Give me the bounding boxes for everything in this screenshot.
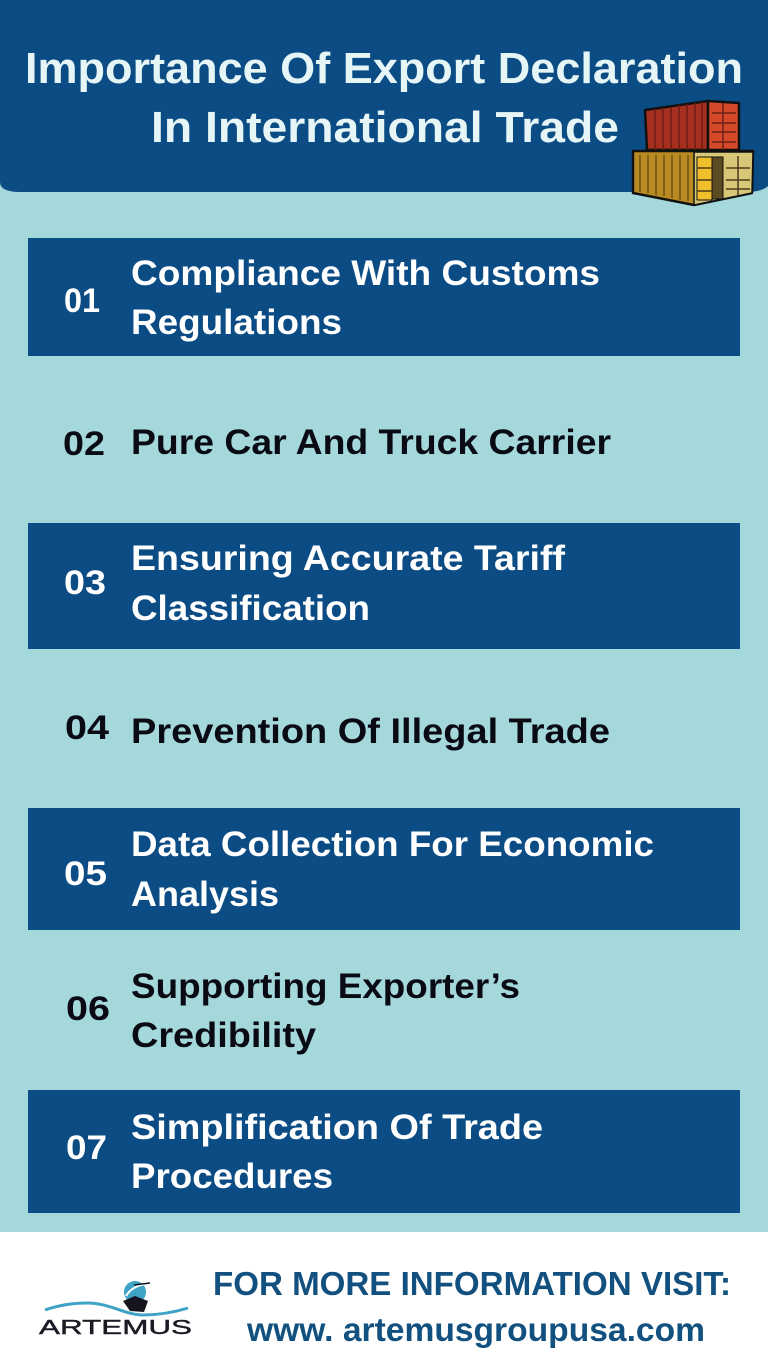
number 01: 01	[64, 282, 100, 320]
wave	[45, 1303, 188, 1315]
label 03: Ensuring Accurate Tariff	[131, 539, 565, 578]
label 01: Regulations	[131, 303, 342, 342]
number 05: 05	[64, 855, 107, 893]
title: In International Trade	[151, 103, 619, 152]
label 05: Data Collection For Economic	[131, 825, 654, 864]
label 06: Supporting Exporter’s	[131, 967, 520, 1006]
label 07: Procedures	[131, 1157, 333, 1196]
item 05 panel	[28, 808, 740, 930]
footer panel	[0, 1232, 768, 1365]
label 05: Analysis	[131, 875, 279, 914]
label 07	[131, 1108, 543, 1196]
label 02: Pure Car And Truck Carrier	[131, 423, 611, 462]
call to action: FOR MORE INFORMATION VISIT:	[213, 1265, 731, 1302]
label 06: Credibility	[131, 1016, 317, 1055]
item 02	[63, 423, 611, 463]
number 06: 06	[66, 990, 110, 1028]
label 03: Classification	[131, 589, 370, 628]
header banner	[0, 0, 768, 192]
item 07 panel	[28, 1090, 740, 1213]
logo: Artemus	[39, 1281, 192, 1339]
icon: ship	[123, 1296, 148, 1312]
label 04: Prevention Of Illegal Trade	[131, 712, 610, 751]
call to action	[213, 1265, 731, 1348]
logo wordmark: ARTEMUS	[39, 1317, 192, 1339]
label 03	[131, 539, 565, 628]
title	[25, 44, 743, 152]
item 01 panel	[28, 238, 740, 356]
number 02: 02	[63, 425, 105, 463]
icon: stacked shipping containers	[633, 101, 753, 205]
title: Importance Of Export Declaration	[25, 44, 743, 93]
item 04	[65, 709, 610, 751]
item 06	[66, 967, 520, 1055]
number 07: 07	[66, 1129, 107, 1167]
label 01	[131, 254, 600, 342]
label 07: Simplification Of Trade	[131, 1108, 543, 1147]
label 05	[131, 825, 654, 914]
icon: sun disc	[124, 1281, 146, 1303]
number 04: 04	[65, 709, 109, 747]
item 03 panel	[28, 523, 740, 649]
number 03: 03	[64, 564, 106, 602]
label 01: Compliance With Customs	[131, 254, 600, 293]
call to action: www. artemusgroupusa.com	[246, 1311, 705, 1348]
label 06	[131, 967, 520, 1055]
